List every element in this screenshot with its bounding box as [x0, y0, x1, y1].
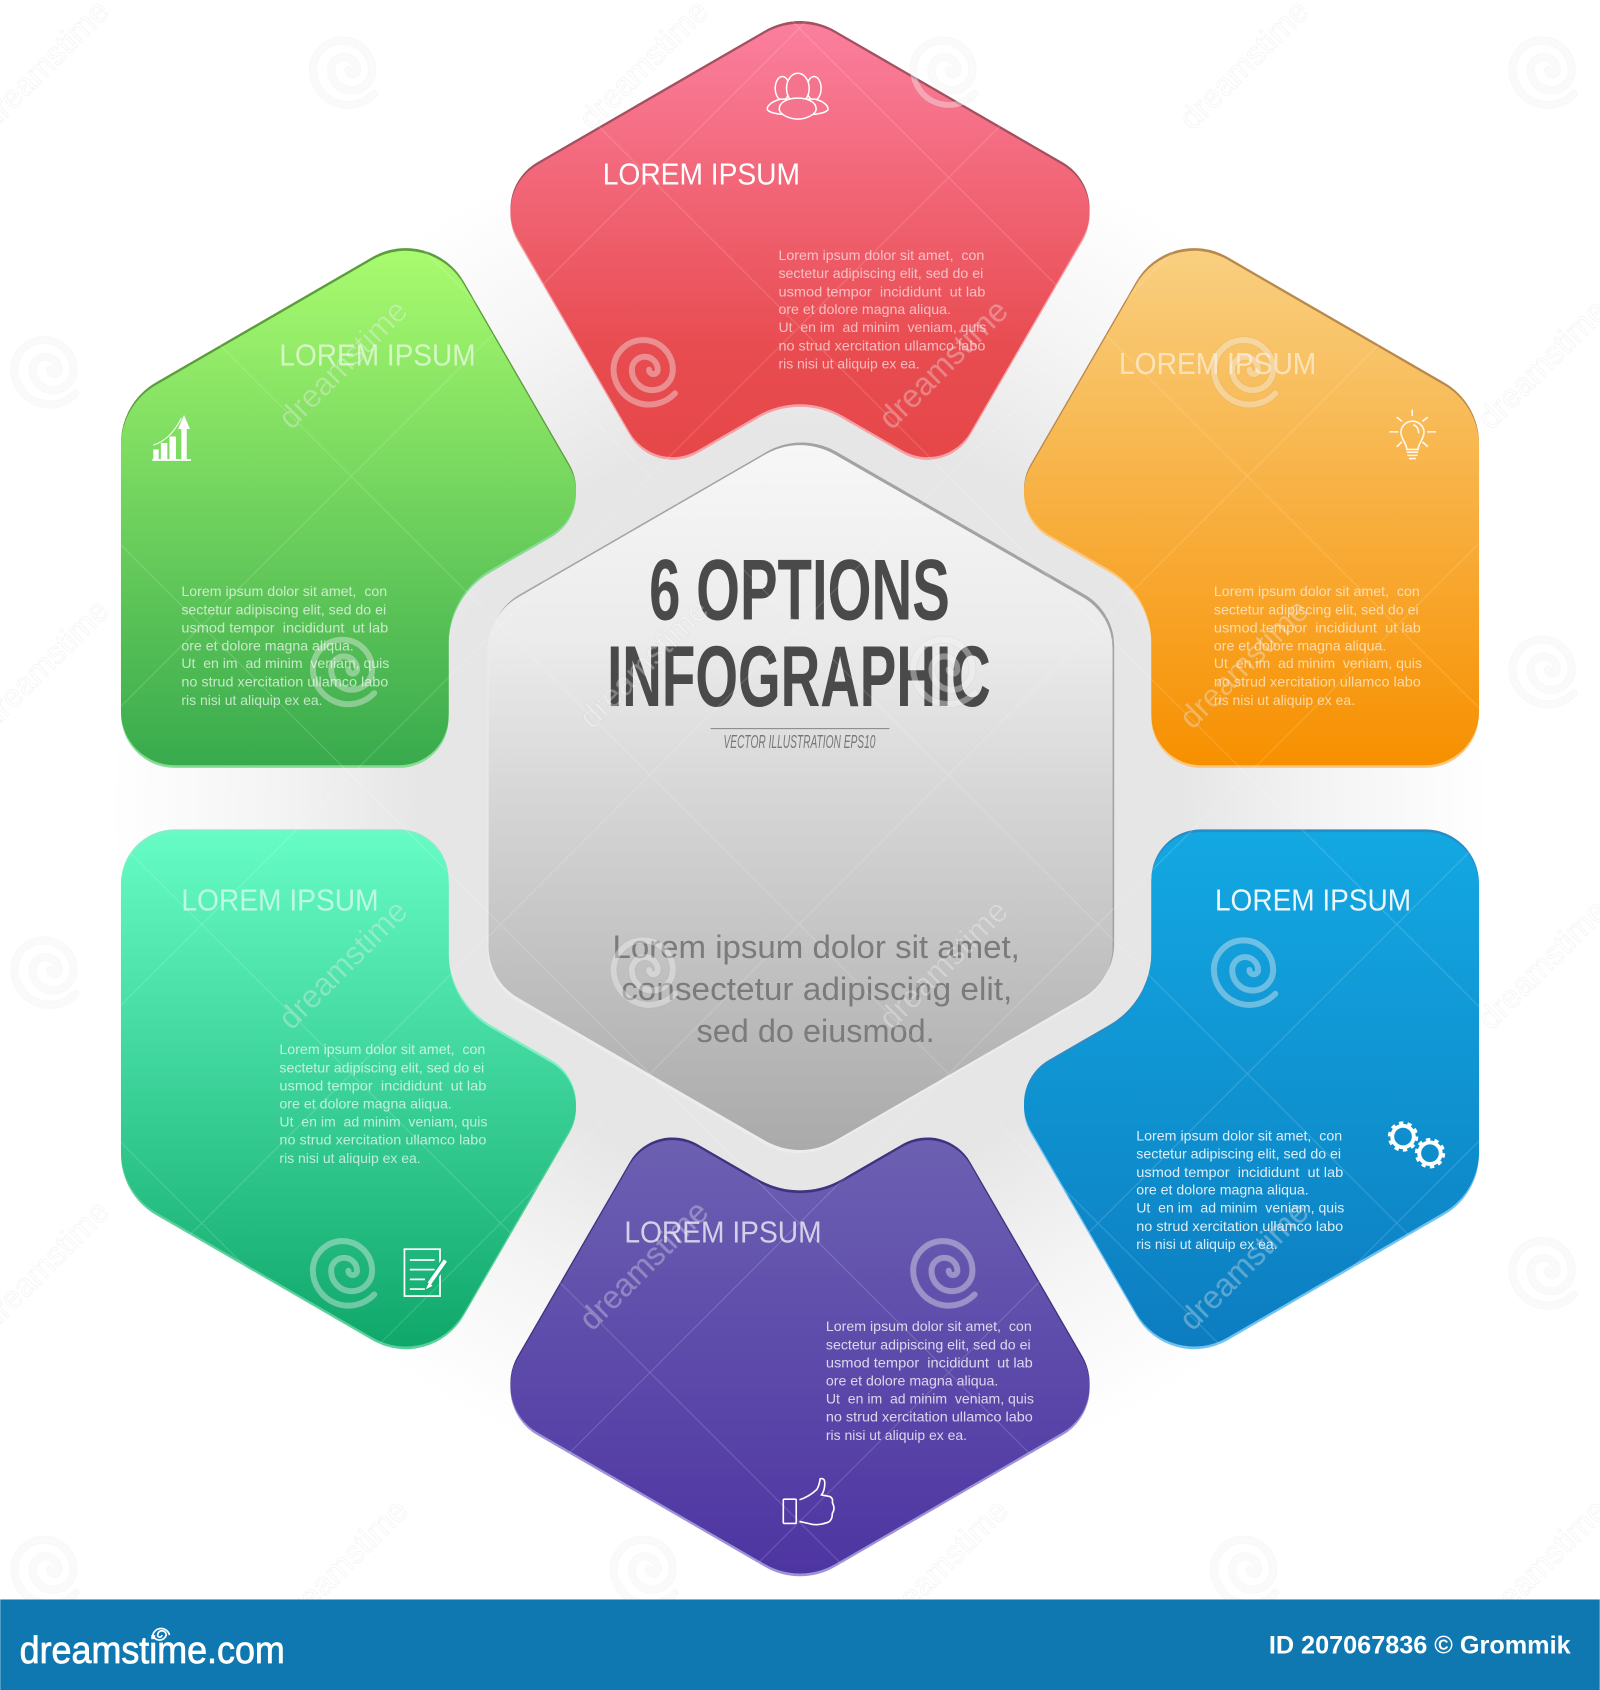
title: 6 OPTIONS	[649, 543, 950, 639]
text block: green: ore et dolore magna aliqua.	[181, 638, 354, 653]
text block: blue: Lorem ipsum dolor sit amet, con	[1136, 1128, 1342, 1143]
footer logo spiral	[153, 1629, 169, 1640]
title: INFOGRAPHIC	[607, 629, 991, 725]
icon: document and pencil	[404, 1249, 445, 1296]
text block: blue: Ut en im ad minim veniam, quis	[1136, 1201, 1344, 1216]
watermark text: dreamstime	[271, 893, 415, 1036]
watermark text: dreamstime	[572, 592, 715, 735]
panel: blue bottom-right option	[1024, 829, 1479, 1349]
text block: purple: ore et dolore magna aliqua.	[826, 1374, 998, 1389]
watermark text: dreamstime	[1172, 592, 1316, 735]
text block: orange: usmod tempor incididunt ut lab	[1214, 621, 1421, 636]
watermark text: dreamstime	[1172, 1193, 1316, 1337]
text block: green: Ut en im ad minim veniam, quis	[181, 656, 390, 671]
heading: orange: LOREM IPSUM	[1119, 348, 1316, 381]
text block: blue: no strud xercitation ullamco labo	[1136, 1219, 1343, 1234]
text block: teal: usmod tempor incididunt ut lab	[279, 1079, 486, 1094]
text block: orange: ore et dolore magna aliqua.	[1214, 638, 1386, 653]
text block: green: no strud xercitation ullamco labo	[181, 675, 388, 690]
text block: teal: ris nisi ut aliquip ex ea.	[279, 1151, 421, 1166]
text block: red: no strud xercitation ullamco labo	[778, 338, 985, 353]
watermark text: dreamstime	[271, 1492, 415, 1635]
central text block	[612, 929, 1020, 1049]
text block: teal: no strud xercitation ullamco labo	[279, 1133, 486, 1148]
heading: blue: LOREM IPSUM	[1215, 885, 1411, 918]
text block: green: usmod tempor incididunt ut lab	[181, 621, 388, 636]
text block: teal: Lorem ipsum dolor sit amet, con	[279, 1042, 485, 1057]
text block: orange: Ut en im ad minim veniam, quis	[1214, 656, 1422, 671]
icon: gears	[1389, 1123, 1444, 1167]
text block: red: ris nisi ut aliquip ex ea.	[778, 357, 920, 372]
text block: blue: sectetur adipiscing elit, sed do ei	[1136, 1147, 1341, 1162]
text block: green: sectetur adipiscing elit, sed do ei	[181, 602, 386, 617]
watermark text: dreamstime	[572, 1193, 715, 1337]
panel: red top option	[510, 21, 1090, 460]
icon: light bulb	[1390, 410, 1436, 459]
text block: teal: Ut en im ad minim veniam, quis	[279, 1114, 488, 1129]
heading: teal: LOREM IPSUM	[181, 885, 379, 918]
text block: red: sectetur adipiscing elit, sed do ei	[778, 266, 983, 281]
panel: purple bottom option	[510, 1137, 1090, 1576]
text block: purple	[826, 1319, 1034, 1443]
watermark text: dreamstime	[271, 292, 415, 436]
text block: teal: ore et dolore magna aliqua.	[279, 1097, 452, 1112]
text block: blue	[1136, 1128, 1344, 1252]
text block: purple: Lorem ipsum dolor sit amet, con	[826, 1319, 1032, 1334]
text block: orange: no strud xercitation ullamco labo	[1214, 675, 1421, 690]
text block: green	[181, 584, 390, 708]
text block: teal: sectetur adipiscing elit, sed do ei	[279, 1060, 484, 1075]
icon: growth chart	[152, 415, 191, 461]
panel: green top-left option	[121, 248, 576, 768]
watermark text: dreamstime	[871, 292, 1015, 436]
text block: blue: usmod tempor incididunt ut lab	[1136, 1165, 1343, 1180]
watermark text: dreamstime	[871, 1492, 1015, 1635]
subtitle with rule: VECTOR ILLUSTRATION EPS10	[723, 731, 876, 752]
heading: green: LOREM IPSUM	[279, 339, 476, 372]
central text block: sed do eiusmod.	[697, 1013, 935, 1049]
text block: green: Lorem ipsum dolor sit amet, con	[181, 584, 387, 599]
title	[607, 543, 991, 725]
text block: orange: ris nisi ut aliquip ex ea.	[1214, 693, 1355, 708]
text block: teal	[279, 1042, 488, 1166]
heading: red: LOREM IPSUM	[603, 158, 800, 191]
text block: purple: no strud xercitation ullamco labo	[826, 1410, 1033, 1425]
text block: purple: Ut en im ad minim veniam, quis	[826, 1391, 1034, 1406]
heading: purple: LOREM IPSUM	[624, 1217, 822, 1250]
text block: red: ore et dolore magna aliqua.	[778, 302, 951, 317]
text block: green: ris nisi ut aliquip ex ea.	[181, 693, 323, 708]
text block: red	[778, 248, 987, 372]
watermark text: dreamstime	[871, 893, 1015, 1036]
panel: teal bottom-left option	[121, 829, 576, 1349]
text block: purple: sectetur adipiscing elit, sed do ei	[826, 1337, 1031, 1352]
text block: red: Lorem ipsum dolor sit amet, con	[778, 248, 984, 263]
text block: blue: ore et dolore magna aliqua.	[1136, 1183, 1309, 1198]
text block: red: Ut en im ad minim veniam, quis	[778, 320, 987, 335]
text block: purple: usmod tempor incididunt ut lab	[826, 1356, 1033, 1371]
text block: orange: Lorem ipsum dolor sit amet, con	[1214, 584, 1420, 599]
text block: orange	[1214, 584, 1422, 708]
panel: orange top-right option	[1024, 248, 1479, 768]
icon: people	[767, 73, 828, 119]
footer credit: ID 207067836 © Grommik	[1269, 1632, 1571, 1659]
central text block: Lorem ipsum dolor sit amet,	[612, 929, 1020, 965]
footer band	[0, 1599, 1600, 1690]
text block: red: usmod tempor incididunt ut lab	[778, 284, 985, 299]
text block: blue: ris nisi ut aliquip ex ea.	[1136, 1237, 1277, 1252]
text block: orange: sectetur adipiscing elit, sed do ei	[1214, 602, 1419, 617]
footer logo: dreamstime.com	[20, 1629, 285, 1671]
panel: central hexagon	[487, 442, 1114, 1153]
text block: purple: ris nisi ut aliquip ex ea.	[826, 1428, 967, 1443]
icon: thumbs up	[783, 1479, 834, 1525]
central text block: consectetur adipiscing elit,	[621, 971, 1012, 1007]
